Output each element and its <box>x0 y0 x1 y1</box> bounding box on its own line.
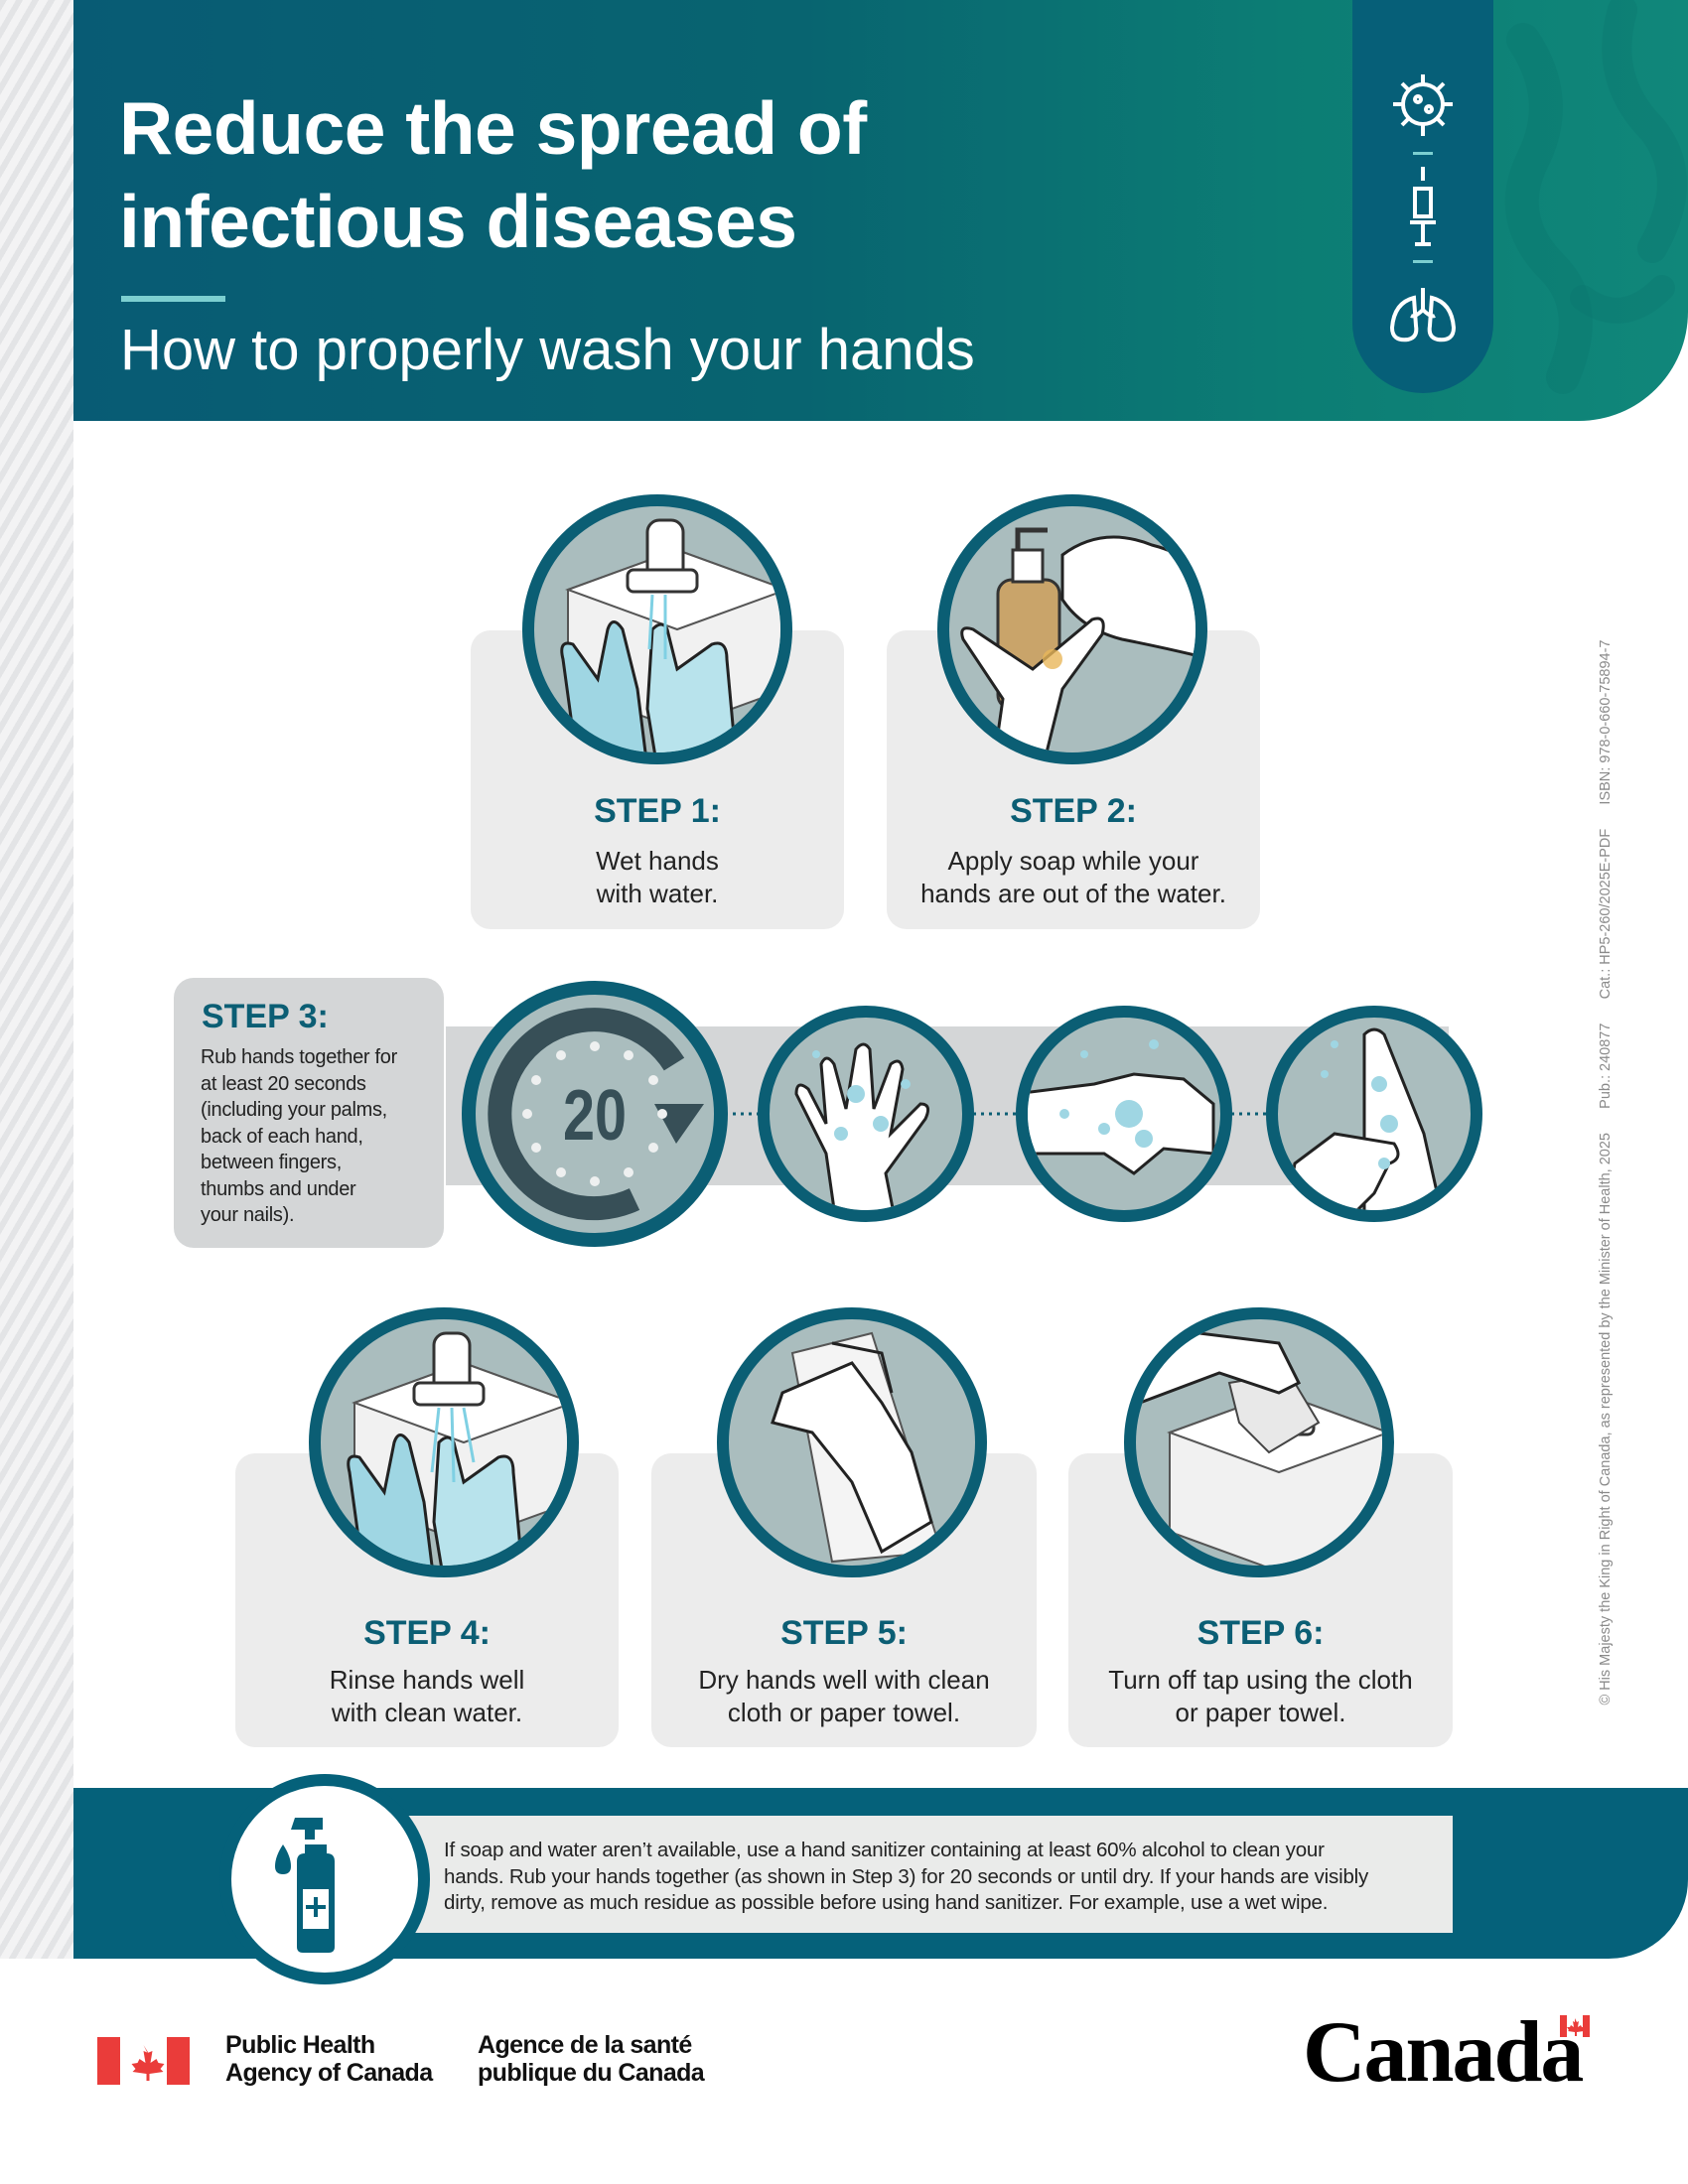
step 6 text: Turn off tap using the cloth <box>1108 1665 1413 1695</box>
footer: agency name french: publique du Canada <box>478 2059 704 2087</box>
step 4 text: with clean water. <box>332 1698 522 1727</box>
step 1 text: with water. <box>597 879 718 908</box>
icon: fingers interlaced <box>758 1006 974 1222</box>
footer: agency name english <box>225 2031 433 2087</box>
canada wordmark: Canada <box>1303 2004 1582 2101</box>
vertical copyright text: © His Majesty the King in Right of Canada, as represented by the Minister of Health, 2025 Pub.: 240877 Cat.: HP5-260/2025E-PDF ISBN: 978-0-660-75894-7 <box>1598 639 1614 1706</box>
step 6 text <box>1108 1665 1413 1727</box>
panel: step 1 <box>471 630 844 929</box>
callout: sanitizer text: dirty, remove as much residue as possible before using hand sanitizer. For example, use a wet wipe. <box>444 1891 1328 1914</box>
step 3 heading: STEP 3: <box>202 998 329 1035</box>
step 3 band <box>446 1026 1449 1185</box>
icon: 20 second timer: 20 <box>563 1075 627 1155</box>
icon: step 1 illustration <box>522 494 792 764</box>
step 2 text: Apply soap while your <box>948 846 1198 876</box>
step 3 text: (including your palms, <box>201 1099 387 1121</box>
icon: back of hand <box>1016 1006 1232 1222</box>
step 6 heading: STEP 6: <box>1197 1614 1324 1652</box>
callout: sanitizer text <box>408 1816 1453 1933</box>
footer: agency name english: Public Health <box>225 2031 375 2059</box>
icon: syringe <box>1410 167 1436 244</box>
step 1 heading: STEP 1: <box>594 792 721 830</box>
header banner <box>73 0 1688 421</box>
icon: virus <box>1393 74 1453 136</box>
panel: step 5 <box>651 1453 1037 1747</box>
step 6 text: or paper towel. <box>1176 1698 1345 1727</box>
icon: palms together <box>1266 1006 1482 1222</box>
step 4 heading: STEP 4: <box>363 1614 491 1652</box>
left stripe border <box>0 0 73 1959</box>
title <box>119 86 868 263</box>
step 3 text: Rub hands together for <box>201 1046 397 1068</box>
step 3 text: your nails). <box>201 1204 294 1226</box>
panel: step 6 <box>1068 1453 1453 1747</box>
icon: step 4 illustration <box>309 1307 579 1577</box>
sanitizer band <box>73 1788 1688 1959</box>
step 5 text: Dry hands well with clean <box>698 1665 990 1695</box>
footer: agency name french: Agence de la santé <box>478 2031 692 2059</box>
step 4 text: Rinse hands well <box>330 1665 524 1695</box>
step 1 text <box>596 846 719 908</box>
footer: agency name english: Agency of Canada <box>225 2059 433 2087</box>
icon: lungs <box>1392 288 1454 340</box>
step 3 text <box>201 1046 397 1226</box>
icon: step 2 illustration <box>937 494 1207 764</box>
step 3 text: back of each hand, <box>201 1126 363 1148</box>
step 1 text: Wet hands <box>596 846 719 876</box>
icon: 20 second timer <box>462 981 728 1247</box>
step 3 text: thumbs and under <box>201 1177 355 1199</box>
panel: step 3 <box>174 978 444 1248</box>
subtitle: How to properly wash your hands <box>120 318 975 382</box>
step 2 heading: STEP 2: <box>1010 792 1137 830</box>
panel: step 2 <box>887 630 1260 929</box>
panel: step 4 <box>235 1453 619 1747</box>
icon: hand sanitizer <box>231 1774 430 1984</box>
icon: step 6 illustration <box>1124 1307 1394 1577</box>
step 2 text: hands are out of the water. <box>920 879 1226 908</box>
step 3 text: between fingers, <box>201 1152 342 1173</box>
title: infectious diseases <box>119 180 796 263</box>
step 2 text <box>920 846 1226 908</box>
callout: sanitizer text: If soap and water aren’t available, use a hand sanitizer containing at least 60% alcohol to clean your <box>444 1839 1325 1861</box>
callout: sanitizer text: hands. Rub your hands together (as shown in Step 3) for 20 seconds or until dry. If your hands are visibly <box>444 1864 1368 1888</box>
icon: step 5 illustration <box>717 1307 987 1577</box>
step 5 text: cloth or paper towel. <box>728 1698 960 1727</box>
dotted connectors <box>727 1112 1266 1116</box>
step 5 heading: STEP 5: <box>780 1614 908 1652</box>
accent line <box>121 296 225 302</box>
icon pill <box>1352 0 1493 393</box>
footer: agency name french <box>478 2031 705 2087</box>
icon: canada flag <box>97 2037 190 2085</box>
step 3 text: at least 20 seconds <box>201 1072 366 1094</box>
title: Reduce the spread of <box>119 86 867 170</box>
step 5 text <box>698 1665 990 1727</box>
step 4 text <box>330 1665 524 1727</box>
